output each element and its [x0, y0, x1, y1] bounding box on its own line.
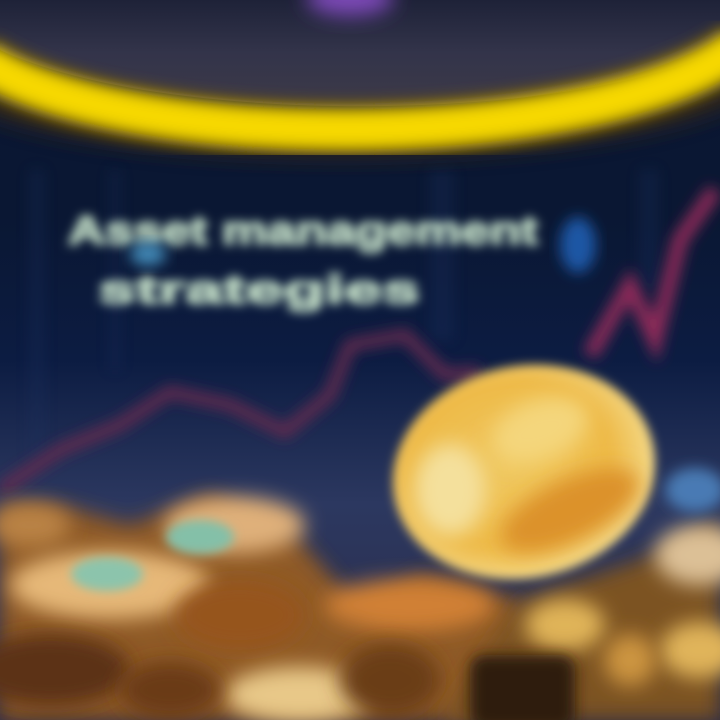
blue gem	[560, 217, 596, 273]
coin pale left	[414, 444, 486, 536]
large gold coin	[373, 341, 675, 603]
dark coin slot	[470, 655, 575, 720]
price line	[0, 190, 715, 490]
yellow arc	[0, 46, 720, 130]
glow below the arc	[0, 90, 720, 148]
coin highlight	[483, 385, 597, 475]
teal patches	[71, 557, 143, 591]
dome at top	[0, 0, 720, 106]
blue accents	[130, 217, 596, 273]
coin shadow side	[489, 451, 651, 569]
coin pile right	[440, 468, 720, 720]
faint vertical columns	[30, 170, 658, 460]
title: strategies	[98, 268, 420, 312]
title: Asset management	[68, 209, 538, 253]
blue patch	[665, 468, 720, 512]
title	[68, 209, 538, 312]
purple glow	[306, 0, 394, 16]
small blue mark	[130, 242, 166, 266]
coin pile left	[0, 495, 560, 720]
